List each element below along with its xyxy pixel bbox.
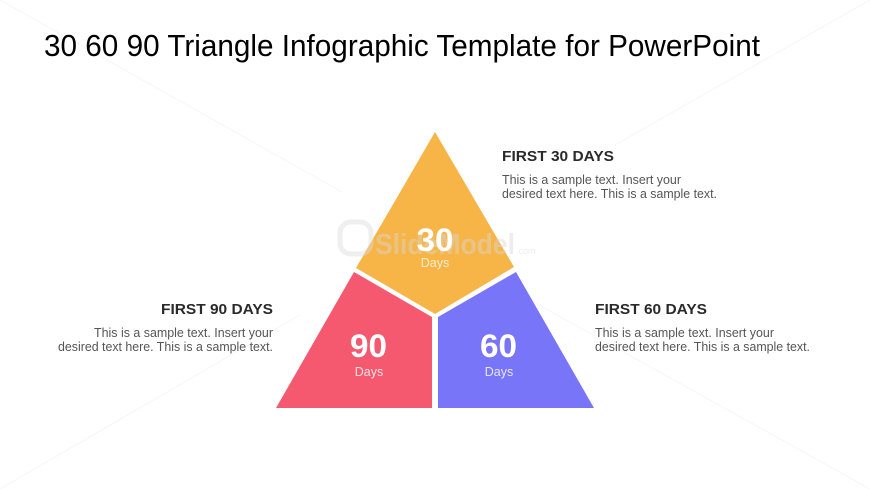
- text block: first 30 days: FIRST 30 DAYS: [502, 148, 614, 165]
- watermark: SlideModel: [375, 229, 515, 261]
- text block: first 30 days: This is a sample text. Insert your: [502, 173, 681, 187]
- label: 30 days: Days: [421, 256, 449, 270]
- text block: first 90 days: [58, 301, 273, 354]
- label: 60 days: Days: [485, 365, 513, 379]
- watermark: .com: [516, 246, 536, 256]
- text block: first 30 days: [502, 148, 717, 201]
- text block: first 90 days: FIRST 90 DAYS: [161, 301, 273, 318]
- text block: first 60 days: This is a sample text. Insert your: [595, 326, 774, 340]
- label: 60 days: [480, 328, 517, 379]
- segment: 60 days: [438, 272, 594, 408]
- label: 90 days: Days: [355, 365, 383, 379]
- label: 90 days: [350, 328, 387, 379]
- text block: first 30 days: desired text here. This is a sample text.: [502, 187, 717, 201]
- text block: first 90 days: This is a sample text. Insert your: [94, 326, 273, 340]
- segment: 30 days: [356, 132, 514, 314]
- text block: first 60 days: desired text here. This is a sample text.: [595, 340, 810, 354]
- watermark: [340, 222, 536, 261]
- triangle infographic: [276, 132, 594, 408]
- label: 30 days: 30: [416, 222, 454, 258]
- segment: 90 days: [276, 272, 432, 408]
- text block: first 60 days: FIRST 60 DAYS: [595, 301, 707, 318]
- label: 60 days: 60: [480, 328, 517, 364]
- label: 90 days: 90: [350, 328, 387, 364]
- text block: first 90 days: desired text here. This is a sample text.: [58, 340, 273, 354]
- text block: first 60 days: [595, 301, 810, 354]
- title: 30 60 90 Triangle Infographic Template for PowerPoint: [44, 28, 760, 63]
